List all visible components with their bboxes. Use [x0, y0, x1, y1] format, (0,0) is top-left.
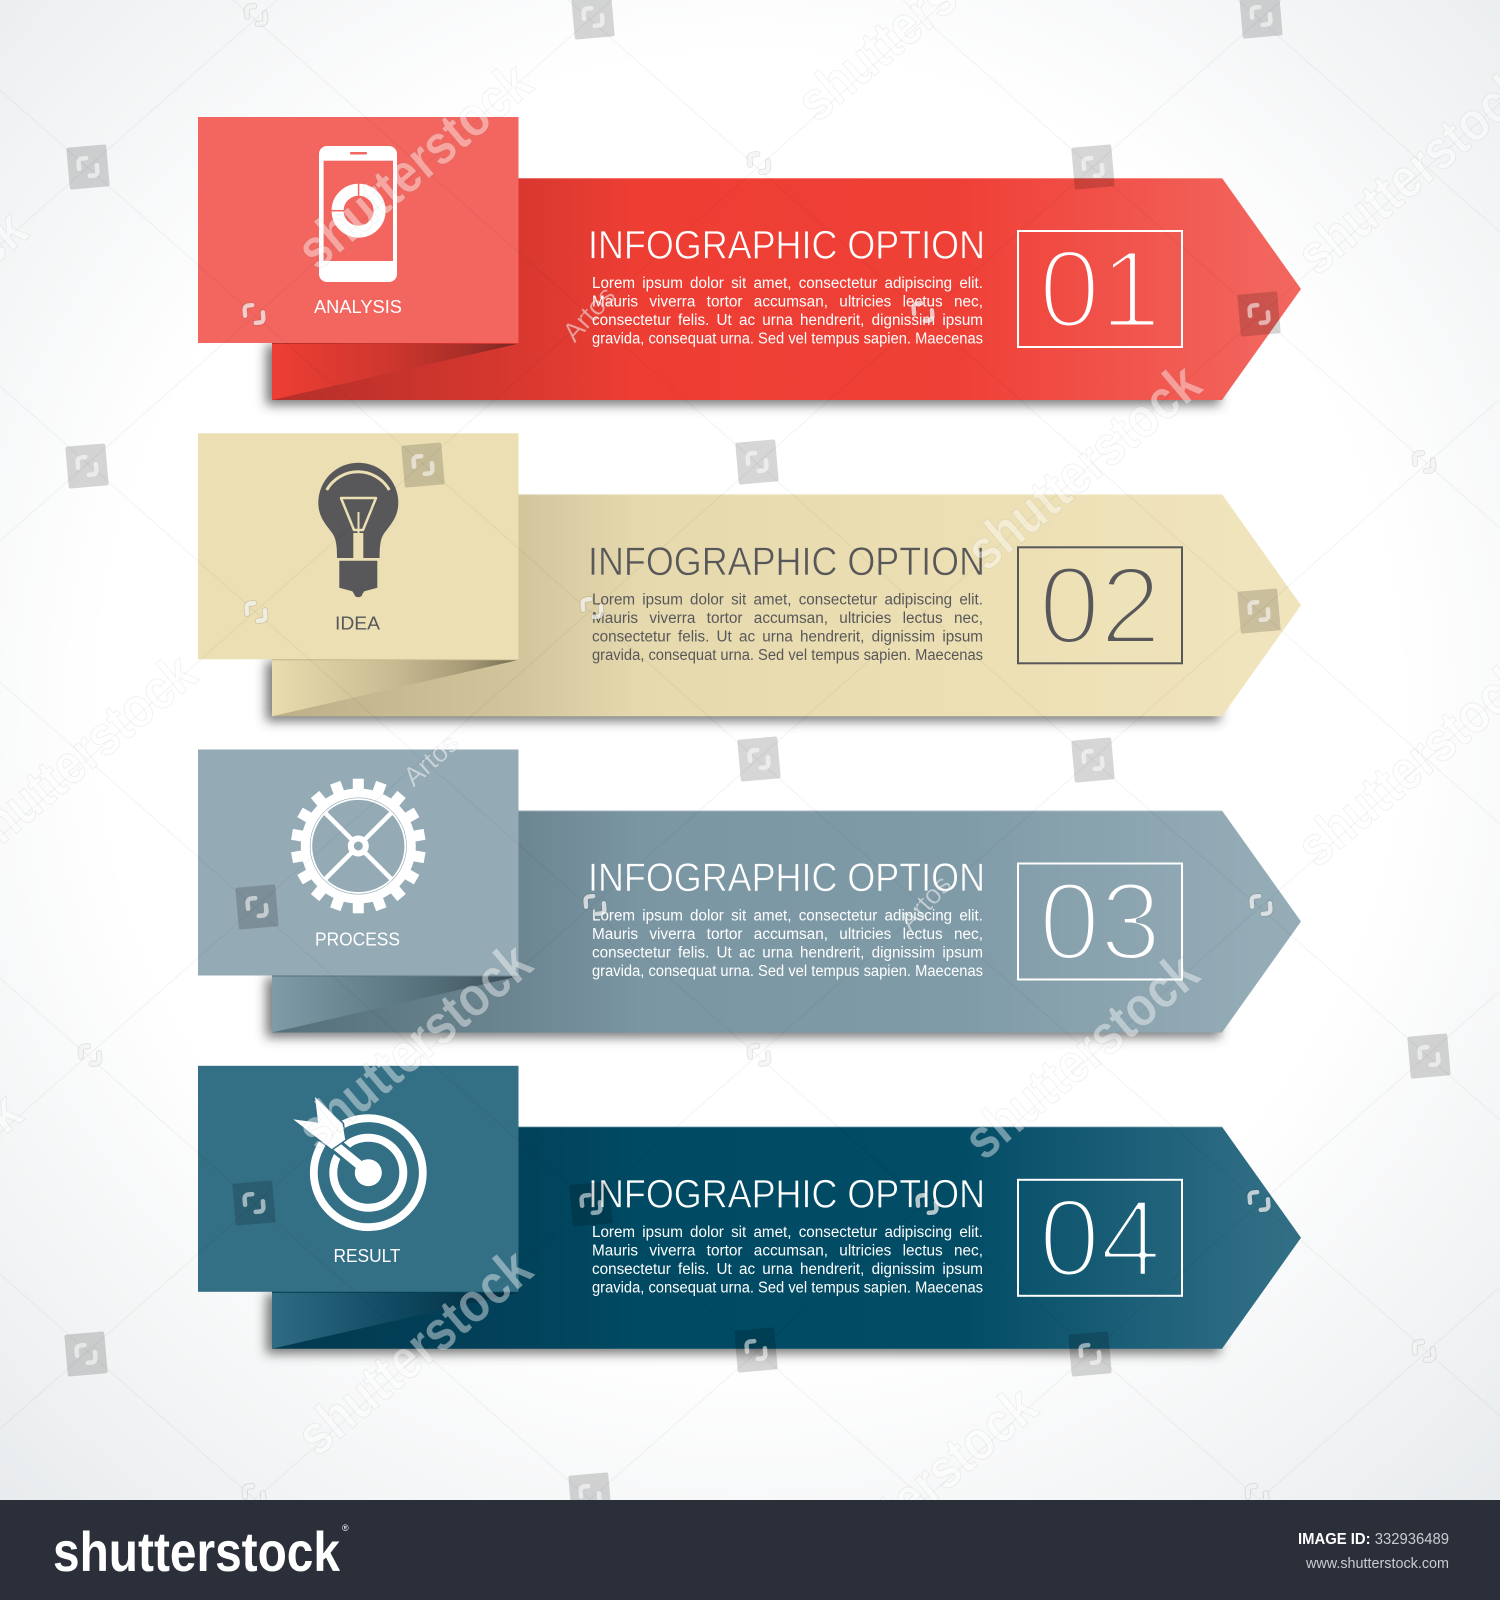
heading 03: INFOGRAPHIC OPTION [588, 856, 985, 900]
row 3: process [198, 750, 1301, 1038]
body text 02 [592, 591, 983, 664]
watermark overlay: shutterstock [953, 350, 1213, 582]
body text 01: gravida, consequat urna. Sed vel tempus sapien. Maecenas [592, 330, 983, 348]
label: analysis: ANALYSIS [314, 296, 402, 317]
body text 01: consectetur felis. Ut ac urna hendrerit, dignissim ipsum [592, 312, 983, 329]
icon: gear [291, 779, 426, 913]
body text 02: Mauris viverra tortor accumsan, ultricies lectus nec, [592, 610, 983, 627]
watermark overlay: shutterstock [284, 49, 544, 281]
icon: light bulb [318, 463, 398, 597]
watermark overlay: Artos [893, 870, 957, 936]
number box 02: 02 [1039, 544, 1161, 667]
body text 04 [592, 1224, 983, 1296]
label: idea: IDEA [335, 612, 381, 633]
body text 01: Mauris viverra tortor accumsan, ultricies lectus nec, [592, 294, 983, 310]
body text 04: Lorem ipsum dolor sit amet, consectetur adipiscing elit. [592, 1224, 983, 1241]
label: process: PROCESS [315, 928, 400, 950]
card 04 [198, 1066, 518, 1292]
body text 04: gravida, consequat urna. Sed vel tempus sapien. Maecenas [592, 1279, 983, 1296]
watermark overlay: shutterstock [951, 939, 1211, 1171]
watermark overlay: Artos [398, 728, 464, 792]
watermark overlay: shutterstock [284, 1235, 544, 1467]
image id: IMAGE ID: 332936489 [1298, 1531, 1449, 1548]
body text 02: gravida, consequat urna. Sed vel tempus sapien. Maecenas [592, 647, 983, 664]
row 4: result [198, 1066, 1301, 1354]
arrow band 02 [266, 494, 1301, 721]
website: www.shutterstock.com [1305, 1555, 1449, 1572]
body text 03: Mauris viverra tortor accumsan, ultricies lectus nec, [592, 926, 983, 943]
card 02 [198, 433, 518, 659]
number box 03: 03 [1039, 860, 1161, 984]
label: result: RESULT [334, 1245, 400, 1266]
footer logo: shutterstock [53, 1520, 341, 1583]
body text 03: consectetur felis. Ut ac urna hendrerit, dignissim ipsum [592, 944, 983, 962]
arrow band 04 [266, 1127, 1301, 1354]
body text 04: consectetur felis. Ut ac urna hendrerit, dignissim ipsum [592, 1261, 983, 1278]
heading 01: INFOGRAPHIC OPTION [588, 224, 985, 268]
arrow band 01 [266, 178, 1301, 405]
watermark overlay: shutterstock [789, 1373, 1049, 1600]
card 03 [198, 750, 518, 976]
body text 03 [592, 908, 983, 980]
body text 02: consectetur felis. Ut ac urna hendrerit, dignissim ipsum [592, 628, 983, 645]
icon: smartphone with donut chart [319, 146, 397, 282]
body text 02: Lorem ipsum dolor sit amet, consectetur adipiscing elit. [592, 591, 983, 608]
row 2: idea [198, 433, 1301, 721]
body text 01: Lorem ipsum dolor sit amet, consectetur adipiscing elit. [592, 275, 983, 292]
body text 03: Lorem ipsum dolor sit amet, consectetur adipiscing elit. [592, 908, 983, 924]
icon: target with arrow [291, 1095, 423, 1227]
footer logo: ® [342, 1523, 349, 1533]
card 01 [198, 117, 518, 343]
number box 01: 01 [1039, 228, 1161, 351]
row 1: analysis [198, 117, 1301, 405]
heading 04: INFOGRAPHIC OPTION [588, 1172, 985, 1216]
heading 02: INFOGRAPHIC OPTION [588, 540, 985, 584]
body text 01 [592, 275, 983, 348]
number box 04: 04 [1039, 1177, 1161, 1300]
footer bar [0, 1500, 1500, 1600]
body text 03: gravida, consequat urna. Sed vel tempus sapien. Maecenas [592, 963, 983, 980]
arrow band 03 [266, 810, 1301, 1038]
watermark overlay: shutterstock [284, 929, 544, 1161]
body text 04: Mauris viverra tortor accumsan, ultricies lectus nec, [592, 1242, 983, 1259]
watermark overlay: Artos [557, 281, 621, 347]
